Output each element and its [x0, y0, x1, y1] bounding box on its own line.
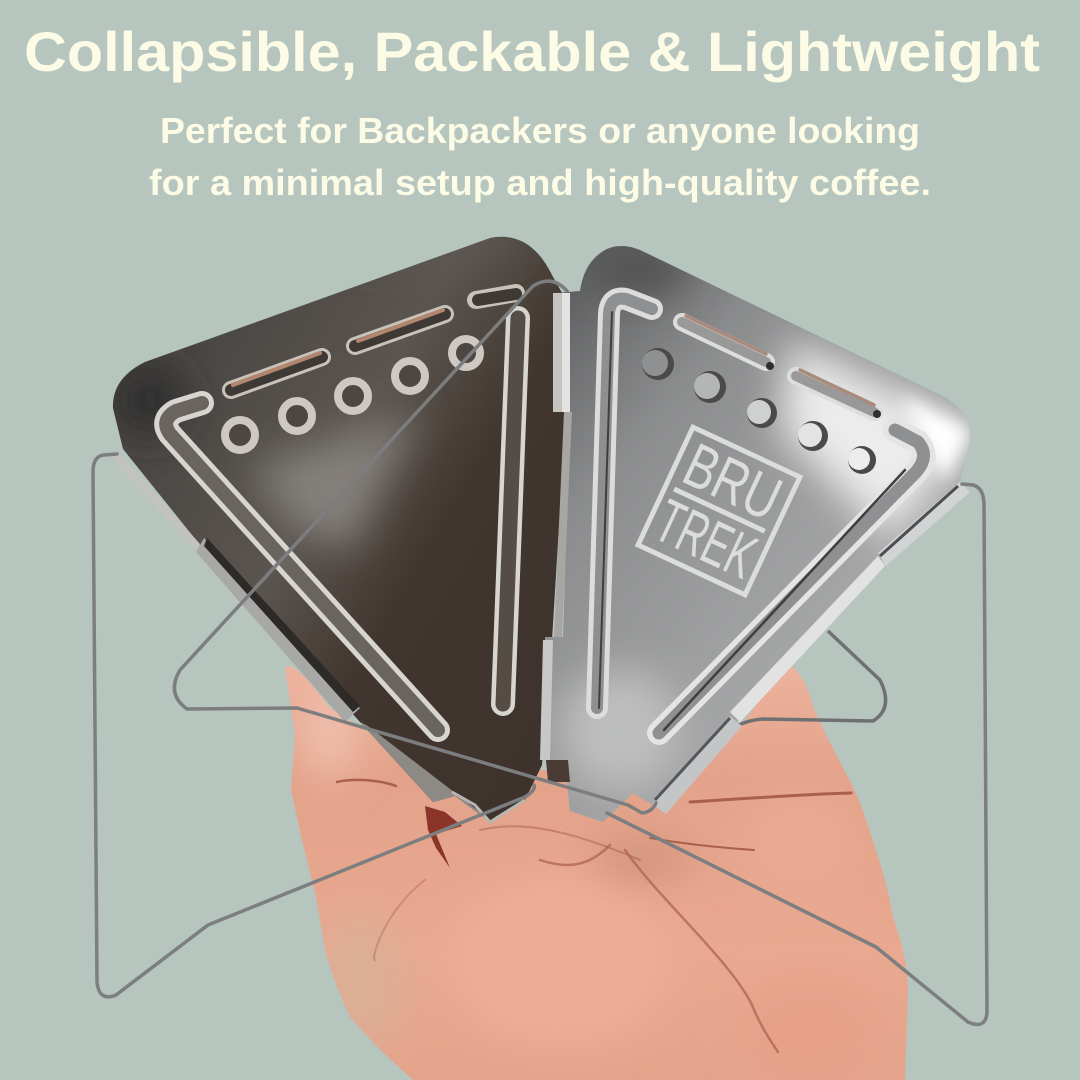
palm creases — [337, 780, 851, 1052]
right hinge rail — [878, 482, 970, 566]
subtitle: for a minimal setup and high-quality coffee. — [149, 162, 931, 203]
hand — [270, 650, 930, 1080]
back wire support — [737, 631, 886, 726]
left hinge rail — [196, 538, 360, 722]
right panel slots — [682, 316, 874, 412]
left lower flap — [360, 722, 490, 822]
tab notch — [546, 760, 570, 782]
thumb gap shadow — [425, 806, 462, 868]
logo: Bru Trek — [638, 426, 800, 596]
subtitle: Perfect for Backpackers or anyone looking — [160, 110, 920, 151]
right panel highlights — [560, 245, 975, 790]
left panel ribs — [166, 318, 518, 730]
left panel holes — [225, 339, 480, 450]
right panel holes — [642, 348, 876, 474]
subtitle — [149, 110, 931, 203]
logo: Bru Trek: TREK — [645, 487, 766, 592]
title: Collapsible, Packable & Lightweight — [24, 20, 1040, 83]
left filter panel — [100, 225, 580, 835]
right panel ribs — [597, 299, 924, 733]
logo: Bru Trek: BRU — [673, 430, 791, 534]
left wire — [93, 454, 534, 997]
center hinge — [540, 293, 572, 782]
wire frame — [93, 281, 987, 1024]
right filter panel — [535, 235, 980, 835]
long centre wire — [174, 281, 656, 813]
left panel light sheen — [115, 233, 520, 550]
right wire — [607, 484, 987, 1024]
left panel slots — [231, 293, 516, 390]
